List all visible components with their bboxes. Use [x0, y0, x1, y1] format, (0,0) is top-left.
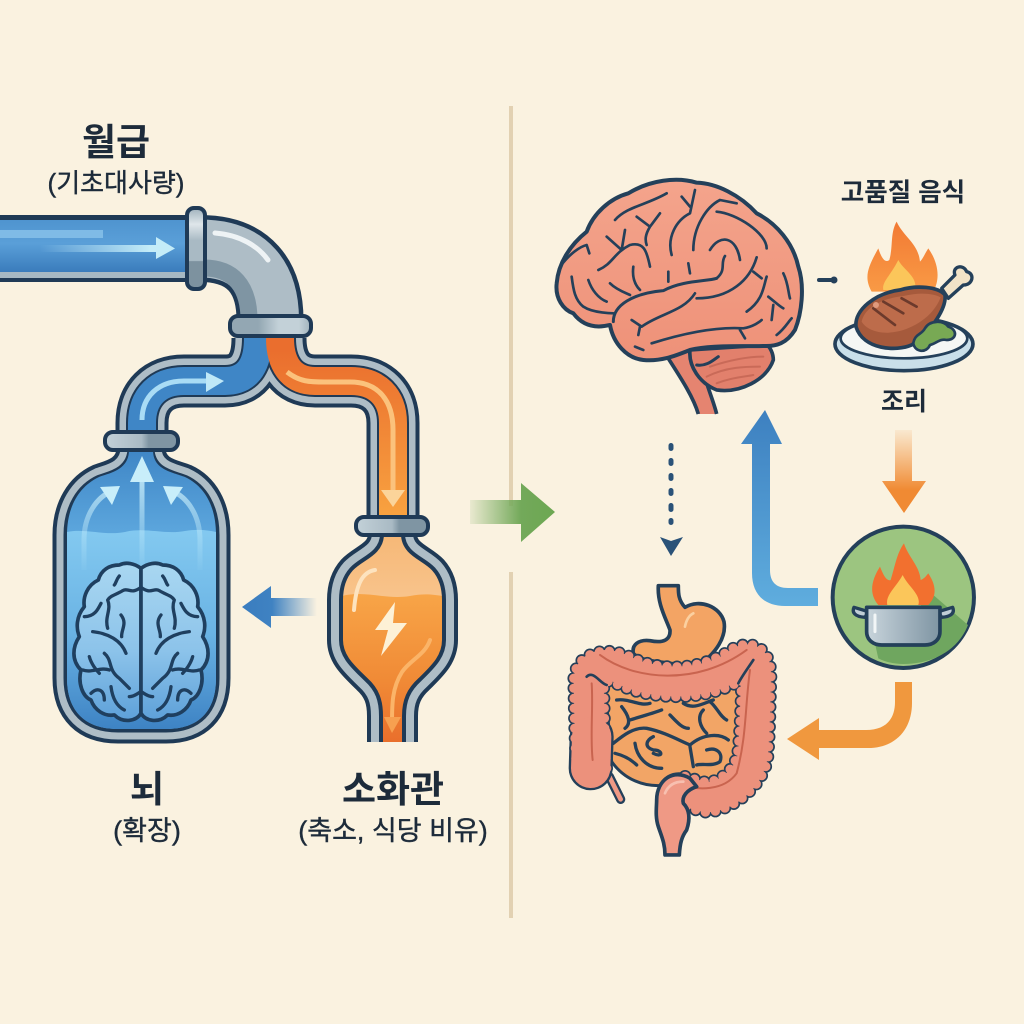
pipe casing: both branches [142, 338, 393, 518]
label: digestive tract: 소화관 [342, 769, 444, 810]
label: brain: (확장) [113, 816, 181, 846]
cerebellum [690, 345, 773, 390]
rectum [656, 775, 697, 855]
title: salary: 월급 [82, 122, 150, 163]
title: salary: (기초대사량) [48, 168, 184, 198]
icon: blue brain [74, 563, 208, 720]
splitter pipes [142, 338, 405, 518]
stomach [633, 586, 724, 667]
label: cooking: 조리 [881, 388, 927, 416]
flame [872, 543, 935, 605]
flask body with water [60, 448, 223, 736]
flange: splitter joint [230, 316, 311, 336]
vertical divider [509, 106, 513, 918]
title: salary [48, 122, 184, 198]
icon: lightning [375, 602, 407, 656]
meat [856, 287, 945, 348]
arrows: upward expansion [84, 456, 200, 570]
main salary pipe with elbow [0, 208, 311, 336]
label: brain: 뇌 [130, 769, 164, 810]
flange: flask neck [105, 432, 178, 450]
short connector dash [817, 276, 838, 284]
arrow: digestive energy to brain [242, 586, 317, 628]
label: digestive tract: (축소, 식당 비유) [298, 816, 488, 846]
large intestine [574, 645, 771, 812]
small intestine [605, 683, 742, 786]
pipe: horizontal blue segment [0, 215, 190, 282]
flask: digestive tract [335, 517, 450, 742]
arrow: orange branch flow [287, 372, 405, 507]
arrow: cooking to brain [741, 410, 818, 606]
arrow: food to cooking [882, 430, 926, 513]
arrow: dotted brain to gut [660, 443, 683, 556]
pipe fluid: blue branch [142, 338, 258, 432]
flame [867, 222, 938, 292]
pot [853, 607, 953, 645]
icon: pink brain side view [556, 180, 802, 414]
pipe: grey elbow [200, 233, 270, 320]
appendix [609, 777, 621, 799]
flange: digestive flask neck [356, 517, 428, 535]
cerebrum [556, 180, 802, 360]
greens [913, 322, 955, 351]
arrow: cooking to gut [787, 682, 912, 760]
flask: brain container [60, 432, 223, 736]
arrow: blue branch flow [142, 372, 224, 420]
arrow: green transition [470, 483, 555, 542]
icon: roasted meat on plate [835, 222, 973, 371]
flask body with fluid [335, 534, 450, 742]
flange: horizontal pipe joint [187, 208, 205, 289]
icon: cooking pot in circle [833, 527, 974, 668]
label: high-quality food: 고품질 음식 [841, 179, 965, 207]
icon: stomach and intestines [574, 586, 771, 855]
bone [942, 267, 972, 298]
brain stem [665, 350, 717, 414]
pipe fluid: orange branch [280, 338, 393, 518]
label: digestive tract [298, 769, 488, 846]
label: brain [113, 769, 181, 846]
plate [835, 317, 973, 371]
circle badge [833, 527, 974, 668]
